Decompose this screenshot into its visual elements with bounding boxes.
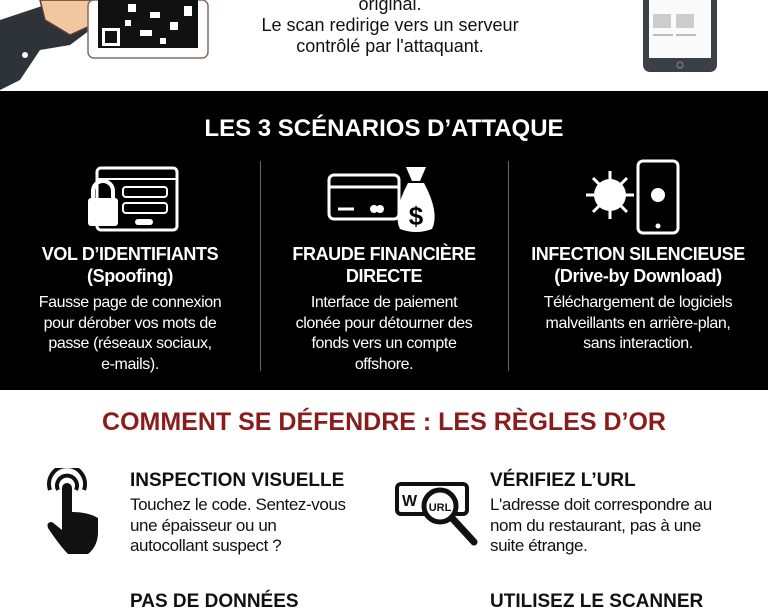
text: e-mails).	[101, 356, 159, 372]
heading: scenarios: LES 3 SCÉNARIOS D’ATTAQUE	[204, 115, 564, 142]
text: suite étrange.	[490, 536, 587, 555]
text: scan note	[261, 0, 519, 56]
icon: finger touch	[47, 468, 98, 554]
text: offshore.	[355, 356, 413, 372]
heading: INSPECTION VISUELLE	[130, 470, 344, 491]
heading	[292, 244, 476, 286]
heading: (Spoofing)	[87, 266, 173, 286]
text: Interface de paiement	[311, 294, 457, 311]
heading: (Drive-by Download)	[554, 266, 722, 286]
icon: virus phone	[586, 160, 680, 234]
icon: phone	[643, 0, 717, 72]
heading: DIRECTE	[346, 266, 422, 286]
heading	[531, 244, 745, 286]
icon: card and money bag	[328, 167, 435, 232]
text: Fausse page de connexion	[39, 294, 221, 311]
text: scan note: contrôlé par l'attaquant.	[296, 36, 484, 56]
text: sans interaction.	[583, 335, 693, 352]
heading	[42, 244, 218, 286]
heading: VÉRIFIEZ L’URL	[490, 470, 636, 491]
heading: use scanner: UTILISEZ LE SCANNER	[490, 591, 703, 612]
icon: hand holding qr	[0, 0, 209, 90]
text: scan note: Le scan redirige vers un serveur	[261, 15, 519, 35]
text	[544, 294, 732, 352]
text: Téléchargement de logiciels	[544, 294, 732, 311]
rule: verify url	[395, 468, 712, 555]
text: nom du restaurant, pas à une	[490, 516, 701, 534]
icon: url magnifier: URL	[429, 502, 452, 514]
rule: visual inspection	[47, 468, 346, 555]
heading: FRAUDE FINANCIÈRE	[292, 244, 476, 264]
text: fonds vers un compte	[312, 335, 456, 352]
text	[296, 294, 472, 372]
heading: no data: PAS DE DONNÉES	[130, 591, 299, 612]
top illustration strip	[0, 0, 717, 90]
text	[39, 294, 221, 372]
column: silent infection	[531, 160, 745, 352]
icon: login lock	[88, 166, 178, 232]
text: autocollant suspect ?	[130, 536, 281, 555]
text	[130, 495, 346, 555]
icon: url magnifier: W	[402, 493, 418, 510]
text: L'adresse doit correspondre au	[490, 495, 712, 514]
text: Touchez le code. Sentez-vous	[130, 495, 346, 514]
icon: card and money bag: $	[409, 201, 424, 231]
text	[490, 495, 712, 555]
text: clonée pour détourner des	[296, 314, 472, 332]
text: passe (réseaux sociaux,	[48, 335, 212, 352]
column: financial fraud	[292, 167, 476, 372]
text: pour dérober vos mots de	[44, 314, 216, 332]
panel: attack scenarios	[0, 91, 768, 390]
icon: url magnifier	[395, 482, 478, 546]
text: une épaisseur ou un	[130, 516, 276, 534]
heading: INFECTION SILENCIEUSE	[531, 244, 745, 264]
heading: VOL D’IDENTIFIANTS	[42, 244, 218, 264]
text: malveillants en arrière-plan,	[546, 314, 730, 332]
heading: golden rules: COMMENT SE DÉFENDRE : LES RÈGLES D’OR	[102, 408, 666, 436]
column: identity theft	[39, 166, 221, 372]
